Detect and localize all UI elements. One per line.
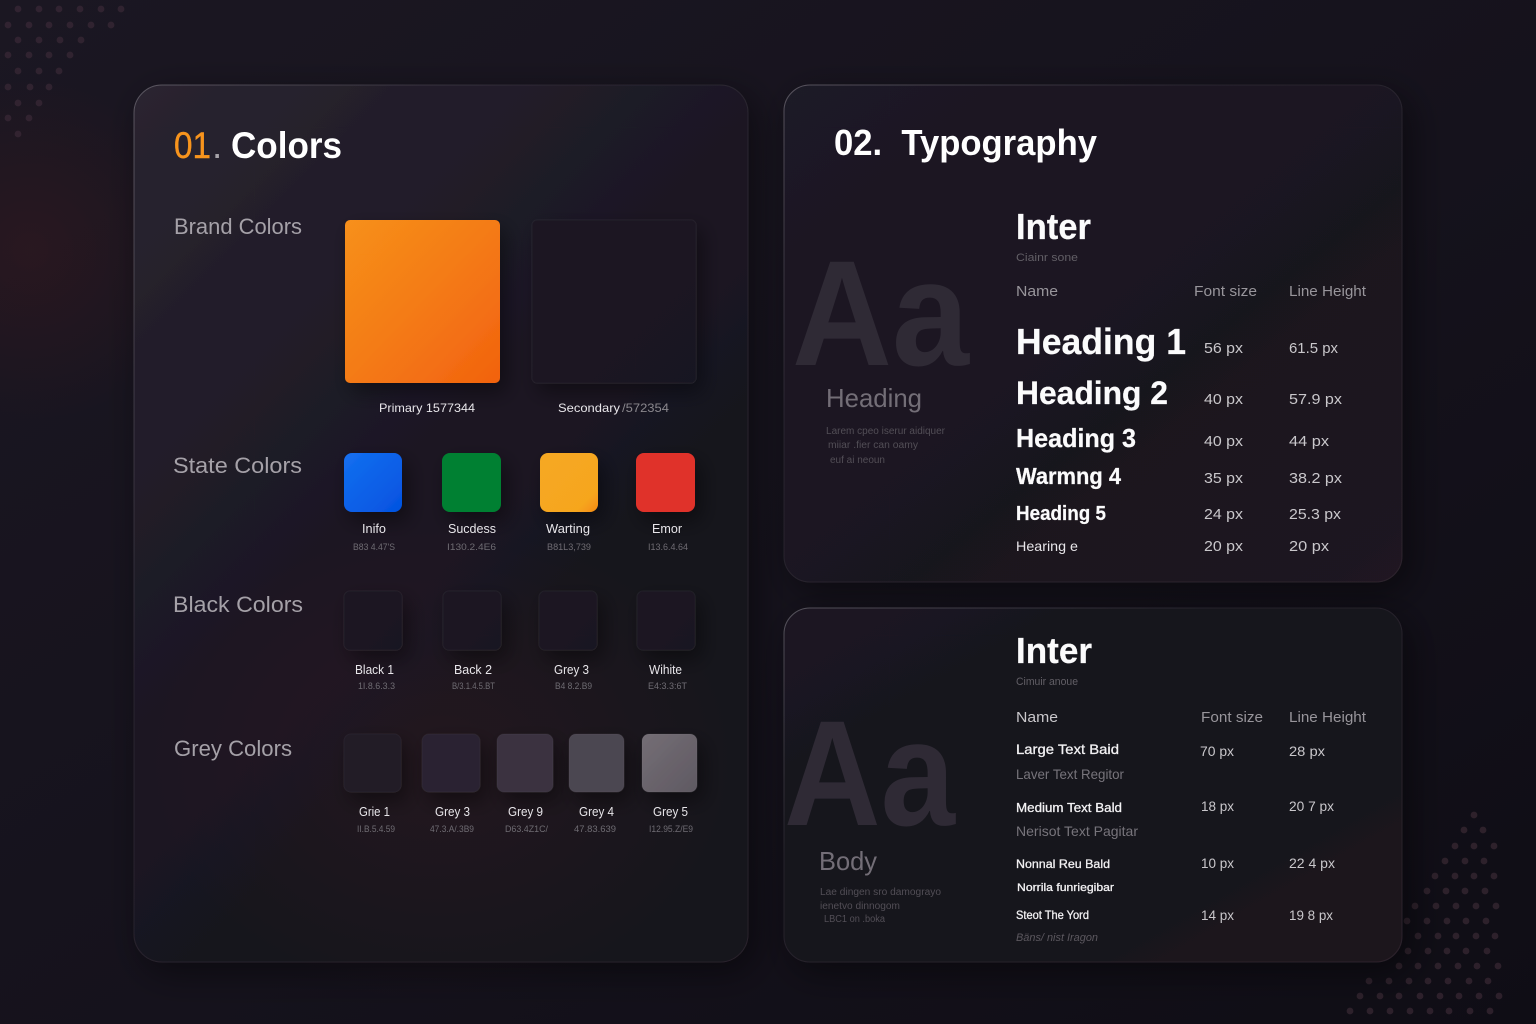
swatch: grey 3: Grey 3 (554, 662, 589, 677)
panel glow: colors (140, 520, 740, 1000)
row: large text: 70 px (1200, 743, 1234, 759)
table header (1016, 283, 1367, 300)
row: warmng 4: Warmng 4 (1016, 463, 1121, 489)
swatch: grey 5 (642, 734, 697, 834)
row: medium text: 20 7 px (1289, 798, 1334, 814)
swatch: grey 9: Grey 9 (508, 804, 543, 819)
heading: brand colors: Brand Colors (174, 214, 302, 239)
description: body: LBC1 on .boka (824, 914, 885, 925)
swatch: info: Inifo (362, 521, 386, 536)
row: heading 2: 40 px (1204, 391, 1244, 408)
heading: grey colors: Grey Colors (174, 736, 292, 761)
row: normal text: Nonnal Reu Bald (1016, 857, 1110, 871)
row: hearing e (1016, 538, 1330, 555)
table header: Name (1016, 283, 1058, 300)
swatch: grey 5: Grey 5 (653, 804, 688, 819)
swatch: grey 4 (569, 734, 624, 834)
row: heading 5: 25.3 px (1289, 506, 1342, 523)
swatch: error: Emor (652, 521, 683, 536)
row: normal text: 10 px (1201, 855, 1234, 871)
row: large text: Laver Text Regitor (1016, 766, 1124, 782)
row: warmng 4: 38.2 px (1289, 470, 1343, 487)
row: normal text: Norrila funriegibar (1017, 882, 1114, 894)
row: heading 3 (1016, 423, 1330, 453)
row: medium text: Medium Text Bald (1016, 800, 1122, 815)
heading: black colors: Black Colors (173, 592, 303, 617)
swatch: success (442, 453, 501, 552)
swatch: grey 5: I12.95.Z/E9 (649, 824, 693, 834)
row: warmng 4 (1016, 463, 1343, 489)
row: hearing e: 20 px (1289, 538, 1330, 555)
row: heading 3: Heading 3 (1016, 423, 1136, 453)
body table header: Font size (1201, 709, 1263, 726)
font subtitle: Ciainr sone (1016, 252, 1078, 264)
panel background: colors (134, 85, 748, 962)
font subtitle body: Cimuir anoue (1016, 676, 1078, 688)
title: 01. Colors (174, 125, 342, 166)
swatch: primary: Primary 1577344 (379, 401, 475, 415)
swatch: white: Wihite (649, 662, 682, 677)
table: heading styles (1016, 283, 1367, 555)
title: 02. Typography: 02. Typography (834, 122, 1097, 163)
swatch: grey 3: B4 8.2.B9 (555, 681, 592, 691)
panel: typography headings (784, 85, 1402, 582)
swatch: warning: B81L3,739 (547, 542, 591, 552)
swatch: black 1: Black 1 (355, 662, 394, 677)
swatch: black 1 (344, 591, 402, 691)
row: heading 5: 24 px (1204, 506, 1244, 523)
row: large text: Large Text Baid (1016, 741, 1119, 757)
dot pattern: top left (5, 6, 124, 137)
swatch: grey 4: 47.83.639 (574, 824, 616, 834)
swatch: success: I130.2.4E6 (447, 542, 496, 552)
swatch: grie 1 (344, 734, 401, 834)
description: heading (826, 426, 946, 466)
swatch: grey 3 (539, 591, 597, 691)
row: heading 1: 61.5 px (1289, 340, 1338, 357)
row: heading 2: Heading 2 (1016, 375, 1168, 411)
swatch: grey 9: D63.4Z1C/ (505, 824, 548, 834)
panel background: body (784, 608, 1402, 962)
font name: inter body: Inter (1016, 630, 1092, 671)
swatch: success: Sucdess (448, 521, 496, 536)
row: heading 3: 40 px (1204, 433, 1244, 450)
row: medium text: 18 px (1201, 798, 1234, 814)
title: 01. Colors: . (212, 125, 222, 166)
table: body styles (1016, 709, 1367, 944)
swatch: secondary: Secondary (558, 401, 620, 415)
swatch: info (344, 453, 402, 552)
swatch: warning: Warting (546, 521, 590, 536)
swatch: grey 3: 47.3.A/.3B9 (430, 824, 474, 834)
row: hearing e: 20 px (1204, 538, 1244, 555)
body table header: Name (1016, 709, 1058, 726)
row: large text (1016, 741, 1325, 782)
row: small text: Bäns/ nist Iragon (1016, 932, 1098, 944)
panel background: headings (784, 85, 1402, 582)
group: brand colors (174, 214, 696, 415)
background glow: left (0, 80, 200, 420)
description: body: ienetvo dinnogom (820, 901, 900, 912)
specimen: Aa body: Aa (784, 689, 956, 857)
body table header (1016, 709, 1367, 726)
group: black colors (173, 591, 695, 691)
title: 01. Colors: 01 (174, 125, 211, 166)
row: heading 1: 56 px (1204, 340, 1244, 357)
swatch: grey 4: Grey 4 (579, 804, 614, 819)
row: large text: 28 px (1289, 743, 1325, 759)
body table header: Line Height (1289, 709, 1367, 726)
label: body: Body (819, 846, 877, 876)
row: heading 1 (1016, 321, 1338, 362)
row: heading 3: 44 px (1289, 433, 1330, 450)
swatch: secondary: /572354 (622, 401, 669, 415)
row: normal text (1016, 855, 1335, 894)
swatch: info: B83 4.47'S (353, 542, 395, 552)
row: small text: 19 8 px (1289, 907, 1333, 923)
row: warmng 4: 35 px (1204, 470, 1244, 487)
label: heading: Heading (826, 383, 922, 413)
title: 01. Colors: Colors (231, 125, 342, 166)
heading: state colors: State Colors (173, 453, 302, 478)
description: body (820, 887, 941, 925)
row: hearing e: Hearing e (1016, 538, 1078, 554)
swatch: grie 1: II.B.5.4.59 (357, 824, 395, 834)
row: heading 5: Heading 5 (1016, 503, 1106, 525)
swatch: error (636, 453, 695, 552)
swatch: back 2: B/3.1.4.5.BT (452, 681, 495, 691)
dot pattern: bottom right (1347, 812, 1502, 1014)
swatch: grie 1: Grie 1 (359, 804, 390, 819)
row: normal text: 22 4 px (1289, 855, 1335, 871)
description: body: Lae dingen sro damograyo (820, 887, 941, 898)
swatch: back 2: Back 2 (454, 662, 492, 677)
group: state colors (173, 453, 695, 552)
row: medium text (1016, 798, 1334, 839)
swatch: white: E4:3.3:6T (648, 681, 687, 691)
swatch: grey 9 (497, 734, 553, 834)
table header: Font size (1194, 283, 1257, 300)
swatch: grey 3: Grey 3 (435, 804, 470, 819)
row: heading 5 (1016, 503, 1342, 525)
swatch: white (637, 591, 695, 691)
swatch: warning (540, 453, 598, 552)
row: medium text: Nerisot Text Pagitar (1016, 823, 1138, 839)
row: small text: 14 px (1201, 907, 1234, 923)
row: small text: Steot The Yord (1016, 908, 1089, 922)
specimen: Aa heading: Aa (792, 229, 970, 397)
swatch: error: I13.6.4.64 (648, 542, 688, 552)
row: heading 1: Heading 1 (1016, 321, 1186, 362)
panel: colors (134, 85, 748, 1000)
swatch: primary (345, 220, 500, 415)
swatch: black 1: 1I.8.6.3.3 (358, 681, 395, 691)
panel: typography body (784, 608, 1402, 962)
description: heading: euf ai neoun (830, 455, 885, 466)
swatch: back 2 (443, 591, 501, 691)
table header: Line Height (1289, 283, 1367, 300)
group: grey colors (174, 734, 697, 834)
swatch: secondary (532, 220, 696, 415)
row: heading 2: 57.9 px (1289, 391, 1343, 408)
description: heading: Larem cpeo iserur aidiquer (826, 426, 946, 437)
swatch: grey 3 (422, 734, 480, 834)
row: small text (1016, 907, 1333, 944)
row: heading 2 (1016, 375, 1343, 411)
description: heading: miiar .fier can oamy (828, 440, 918, 451)
font name: inter: Inter (1016, 206, 1091, 247)
